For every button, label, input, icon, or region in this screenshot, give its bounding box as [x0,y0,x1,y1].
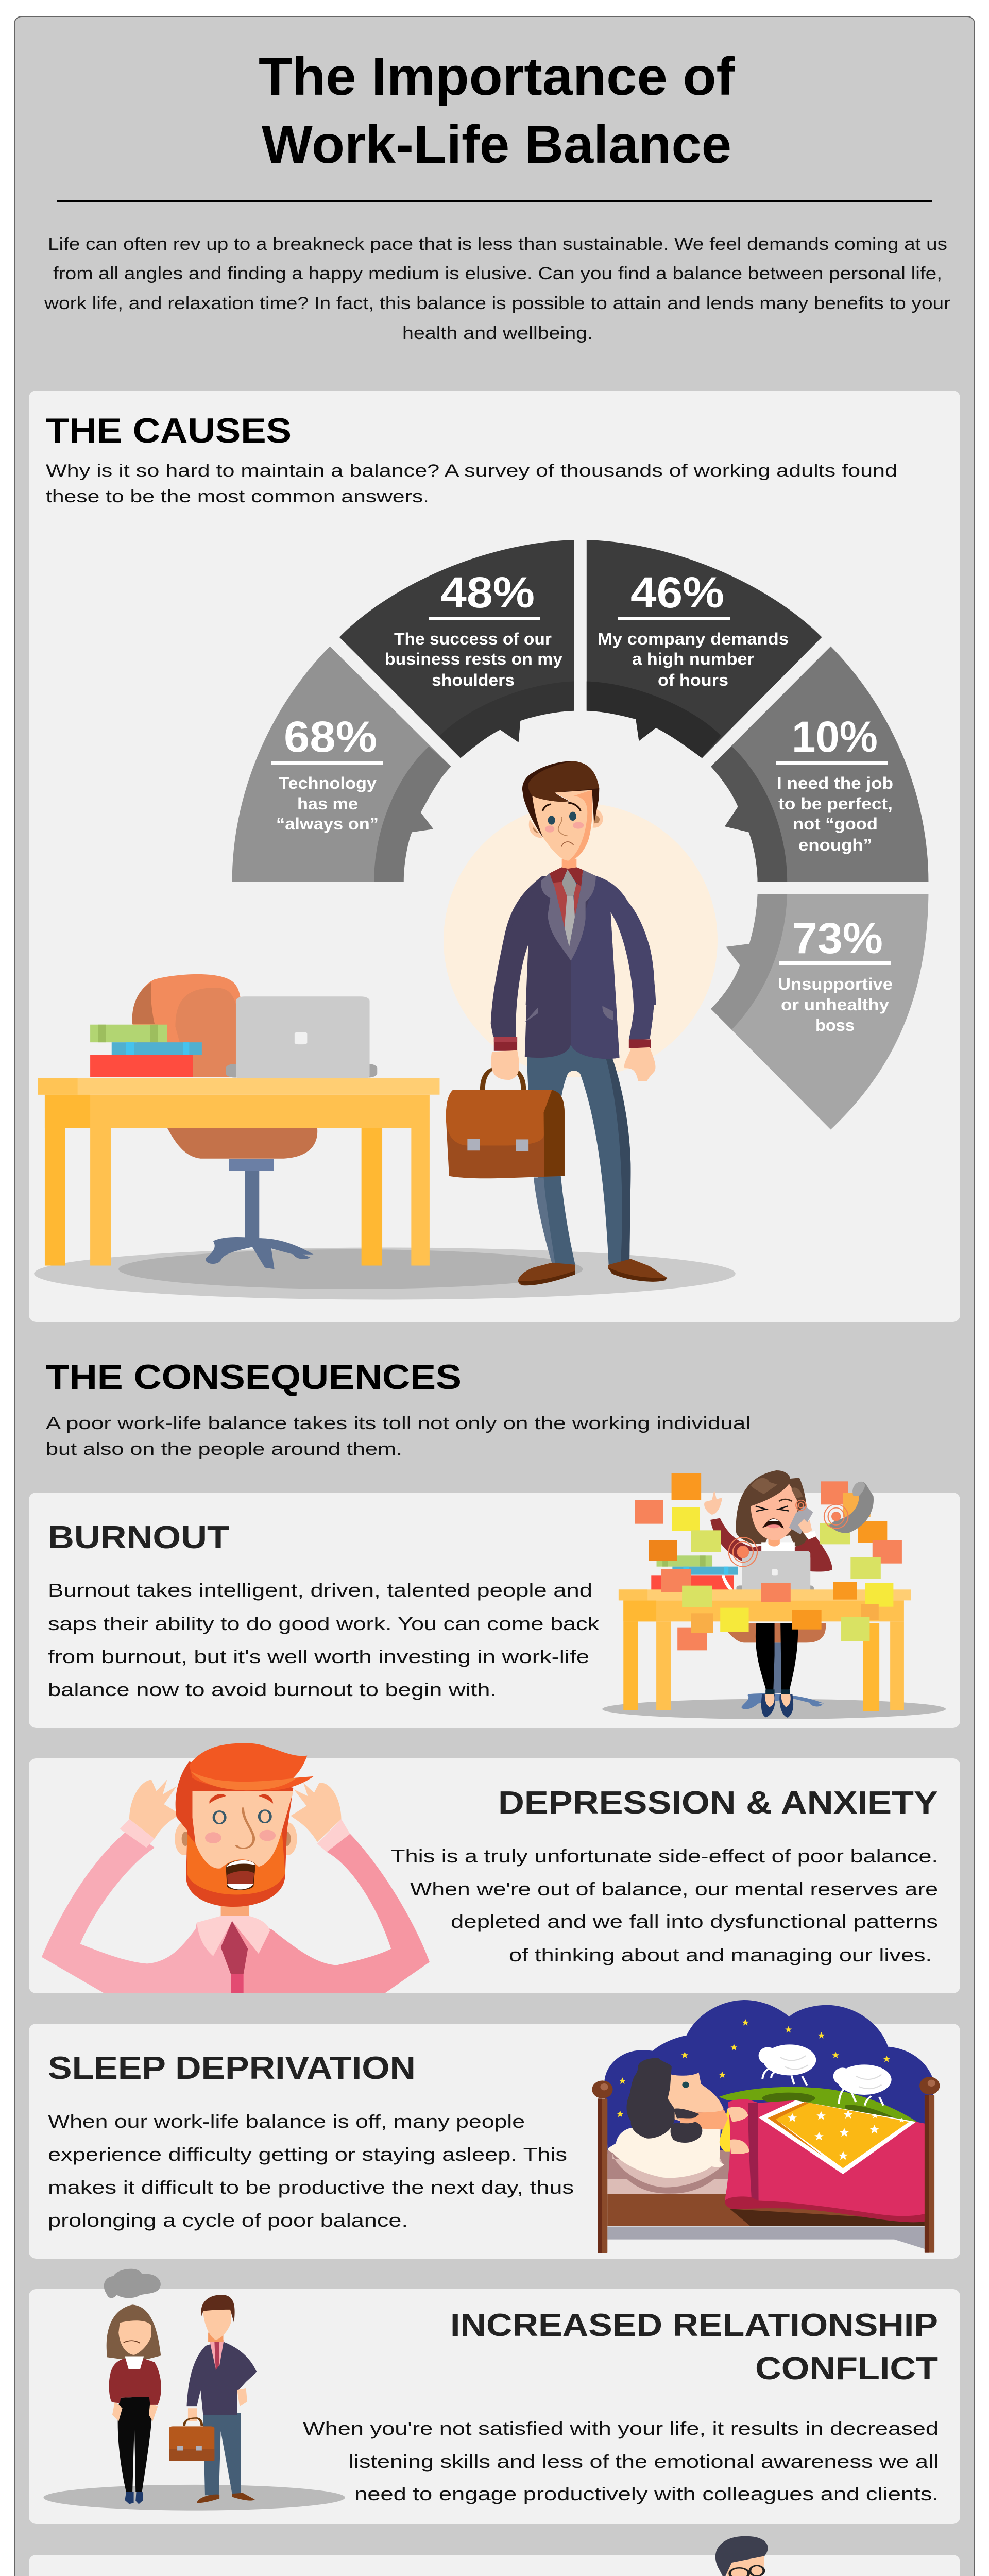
illustration: overwhelmed woman at desk [602,1470,946,1719]
consequences intro text: A poor work-life balance takes its toll not only on the working individual [46,1414,751,1433]
illustration: stressed man with briefcase [446,761,668,1285]
intro text: from all angles and finding a happy medium is elusive. Can you find a balance between personal life, [53,264,942,283]
sleep text: When our work-life balance is off, many people [48,2111,525,2132]
man shoes [518,1263,575,1285]
illustration: couple with grey cloud [43,2269,345,2511]
floor shadow [34,1248,736,1300]
panel: the causes [29,391,960,1322]
causes intro text: Why is it so hard to maintain a balance? A survey of thousands of working adults found [46,461,897,481]
illustration: panicked red-haired man [42,1743,430,1993]
segment: 48%: shoulders [432,671,515,689]
sticky notes [635,1473,902,1650]
illustration: man awake in bed counting sheep [592,2000,940,2253]
heading: depression and anxiety: DEPRESSION & ANXIETY [498,1785,938,1821]
man jacket lower [491,876,655,1059]
panel: sleep deprivation [29,2000,960,2259]
burnout text: balance now to avoid burnout to begin with. [48,1679,497,1700]
consequences intro text: but also on the people around them. [46,1439,402,1459]
heading: increased relationship conflict [450,2308,938,2386]
segment: 48%: The success of our [394,630,552,648]
man cuffs and hands [494,1037,517,1051]
briefcase [483,1068,523,1090]
causes intro text [46,461,897,506]
segment: 73% [711,894,928,1129]
segment: 10%: to be perfect, [778,794,893,813]
panel: increased relationship conflict [29,2269,960,2524]
segment: 46% [587,540,822,758]
segment: 10%: enough” [798,836,872,854]
intro text: Life can often rev up to a breakneck pace that is less than sustainable. We feel demands coming at us [48,234,947,254]
title [259,47,735,175]
heading: burnout: BURNOUT [48,1520,229,1555]
relationship text: listening skills and less of the emotional awareness we all [349,2451,939,2472]
depression text [391,1845,938,1965]
segment: 68%: Technology [279,774,377,792]
intro text: health and wellbeing. [402,324,593,343]
segment: 48%: business rests on my [385,650,562,668]
segment: 68%: 68% [284,713,377,761]
relationship text: When you're not satisfied with your life, it results in decreased [303,2418,939,2439]
title: The Importance of [259,47,735,107]
panel: burnout [29,1470,960,1728]
burnout text: from burnout, but it's well worth investing in work-life [48,1646,589,1667]
heading: the consequences: THE CONSEQUENCES [46,1358,462,1397]
segment: 68%: “always on” [276,815,379,833]
segment: 10%: 10% [792,713,878,761]
heading: increased relationship conflict: CONFLICT [755,2351,938,2386]
panel: depression and anxiety [29,1743,960,1993]
intro text: work life, and relaxation time? In fact, this balance is possible to attain and lends many benefits to your [44,294,950,313]
segment: 46%: of hours [658,671,728,689]
depression text: depleted and we fall into dysfunctional patterns [451,1911,938,1932]
segment: 46%: 46% [630,568,724,617]
sleep text: prolonging a cycle of poor balance. [48,2210,408,2231]
segment: 10%: I need the job [777,774,893,792]
heading: sleep deprivation: SLEEP DEPRIVATION [48,2050,416,2086]
segment: 46%: a high number [632,650,754,668]
causes intro text: these to be the most common answers. [46,487,429,506]
sleep text [48,2111,574,2231]
segment: 48% [339,540,574,758]
man head and upper body [492,761,656,1005]
title: Work-Life Balance [262,115,731,175]
segment: 10% [711,647,928,882]
depression text: of thinking about and managing our lives. [509,1944,932,1965]
desk, chair, books and laptop [38,974,439,1269]
depression text: This is a truly unfortunate side-effect of poor balance. [391,1845,938,1867]
depression text: When we're out of balance, our mental reserves are [410,1878,938,1900]
segment: 73%: Unsupportive [778,975,893,993]
man trousers [527,1044,630,1265]
heading: the causes: THE CAUSES [46,411,292,450]
relationship text: need to engage productively with colleagues and clients. [354,2483,939,2504]
segment: 46%: My company demands [598,630,789,648]
sleep text: experience difficulty getting or staying asleep. This [48,2144,567,2165]
illustration: worried father and laughing daughter [623,2536,948,2576]
segment: 10%: not “good [793,815,878,833]
consequences intro text [46,1414,751,1459]
burnout text [48,1580,600,1700]
segment: 48%: 48% [440,568,535,617]
heading: increased relationship conflict: INCREASED RELATIONSHIP [450,2308,938,2343]
relationship text [303,2418,939,2504]
burnout text: saps their ability to do good work. You can come back [48,1613,600,1634]
panel: parent-child tension [29,2536,960,2576]
burnout text: Burnout takes intelligent, driven, talented people and [48,1580,592,1601]
segment: 68%: has me [297,794,358,813]
segment: 73%: boss [815,1016,855,1035]
segment: 73%: 73% [792,914,883,962]
segment: 73%: or unhealthy [781,995,889,1014]
segment: 68% [232,647,451,882]
intro text [44,234,950,343]
sleep text: makes it difficult to be productive the next day, thus [48,2177,574,2198]
cream circle behind man [444,803,718,1077]
